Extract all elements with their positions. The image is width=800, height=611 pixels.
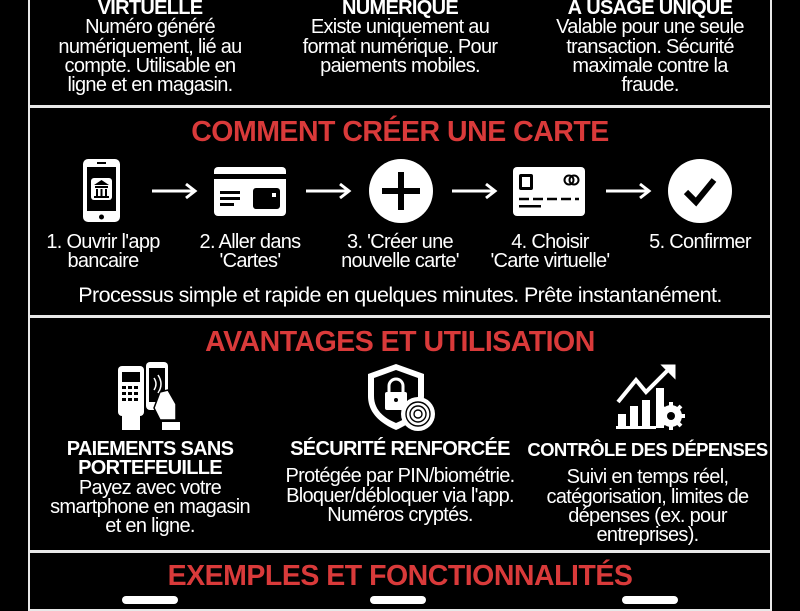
arrow 1 — [152, 182, 198, 200]
column: paiements: smartphone en magasin — [50, 496, 250, 518]
arrow 4 — [606, 182, 652, 200]
footer text: Processus simple et rapide en quelques minutes. Prête instantanément. — [78, 283, 722, 307]
icon: card — [214, 167, 286, 216]
column: usage unique: Valable pour une seule — [556, 16, 744, 38]
column: paiements: PORTEFEUILLE — [78, 457, 222, 479]
heading: avantages: AVANTAGES ET UTILISATION — [205, 326, 595, 358]
column: securite: SÉCURITÉ RENFORCÉE — [290, 438, 510, 460]
step 2: 2. Aller dans — [200, 231, 300, 253]
column: virtuelle: ligne et en magasin. — [67, 74, 232, 96]
column: usage unique — [556, 0, 744, 96]
panel: comment creer — [28, 106, 772, 317]
icon: virtual card — [513, 167, 585, 216]
step 2 — [200, 231, 300, 272]
column: usage unique: maximale contre la — [572, 55, 728, 77]
column: usage unique: fraude. — [621, 74, 679, 96]
column: virtuelle — [58, 0, 242, 96]
column: virtuelle: numériquement, lié au — [58, 36, 242, 58]
icon: check — [668, 159, 732, 223]
step 4: 4. Choisir — [511, 231, 589, 253]
step 3 — [341, 231, 459, 272]
column: paiements: PAIEMENTS SANS — [67, 438, 233, 460]
heading: exemples: EXEMPLES ET FONCTIONNALITÉS — [168, 560, 632, 592]
column: numerique — [302, 0, 498, 77]
column: virtuelle: Numéro généré — [85, 16, 215, 38]
step 5: 5. Confirmer — [649, 231, 751, 253]
column: paiements: et en ligne. — [105, 515, 195, 537]
column: virtuelle: compte. Utilisable en — [65, 55, 235, 77]
column: controle: dépenses (ex. pour — [568, 505, 727, 527]
column: controle: Suivi en temps réel, — [567, 466, 728, 488]
icon: chart — [616, 364, 685, 430]
column: controle — [527, 439, 768, 546]
column: paiements: Payez avec votre — [79, 477, 221, 499]
icon: phone — [83, 159, 120, 222]
heading: comment creer: COMMENT CRÉER UNE CARTE — [191, 116, 609, 148]
panel: types — [28, 0, 772, 107]
step labels — [46, 231, 752, 272]
step 1: bancaire — [67, 250, 139, 272]
column: usage unique: transaction. Sécurité — [566, 36, 734, 58]
column: securite: Bloquer/débloquer via l'app. — [286, 485, 514, 507]
arrow 3 — [452, 182, 498, 200]
step 3: 3. 'Créer une — [347, 231, 453, 253]
column: securite: Numéros cryptés. — [327, 504, 473, 526]
panel: exemples — [28, 551, 772, 611]
step 4: 'Carte virtuelle' — [490, 250, 610, 272]
column: controle: catégorisation, limites de — [547, 486, 748, 508]
column: securite: Protégée par PIN/biométrie. — [285, 465, 514, 487]
column: controle: CONTRÔLE DES DÉPENSES — [527, 439, 768, 460]
panel: avantages — [28, 316, 772, 552]
column: numerique: Existe uniquement au — [311, 16, 489, 38]
icon: shield — [368, 364, 435, 431]
column: securite — [285, 437, 514, 526]
icon tops — [122, 596, 178, 604]
step 1 — [46, 231, 160, 272]
column: numerique: format numérique. Pour — [303, 36, 497, 58]
column: controle: entreprises). — [596, 524, 699, 546]
column: numerique: paiements mobiles. — [320, 55, 480, 77]
icon: plus — [369, 159, 433, 223]
arrow 2 — [306, 182, 352, 200]
step 3: nouvelle carte' — [341, 250, 459, 272]
column: paiements — [50, 438, 250, 537]
step 4 — [490, 231, 610, 272]
step 2: 'Cartes' — [220, 250, 280, 272]
icon: payment terminal — [118, 362, 180, 430]
step 1: 1. Ouvrir l'app — [46, 231, 160, 253]
